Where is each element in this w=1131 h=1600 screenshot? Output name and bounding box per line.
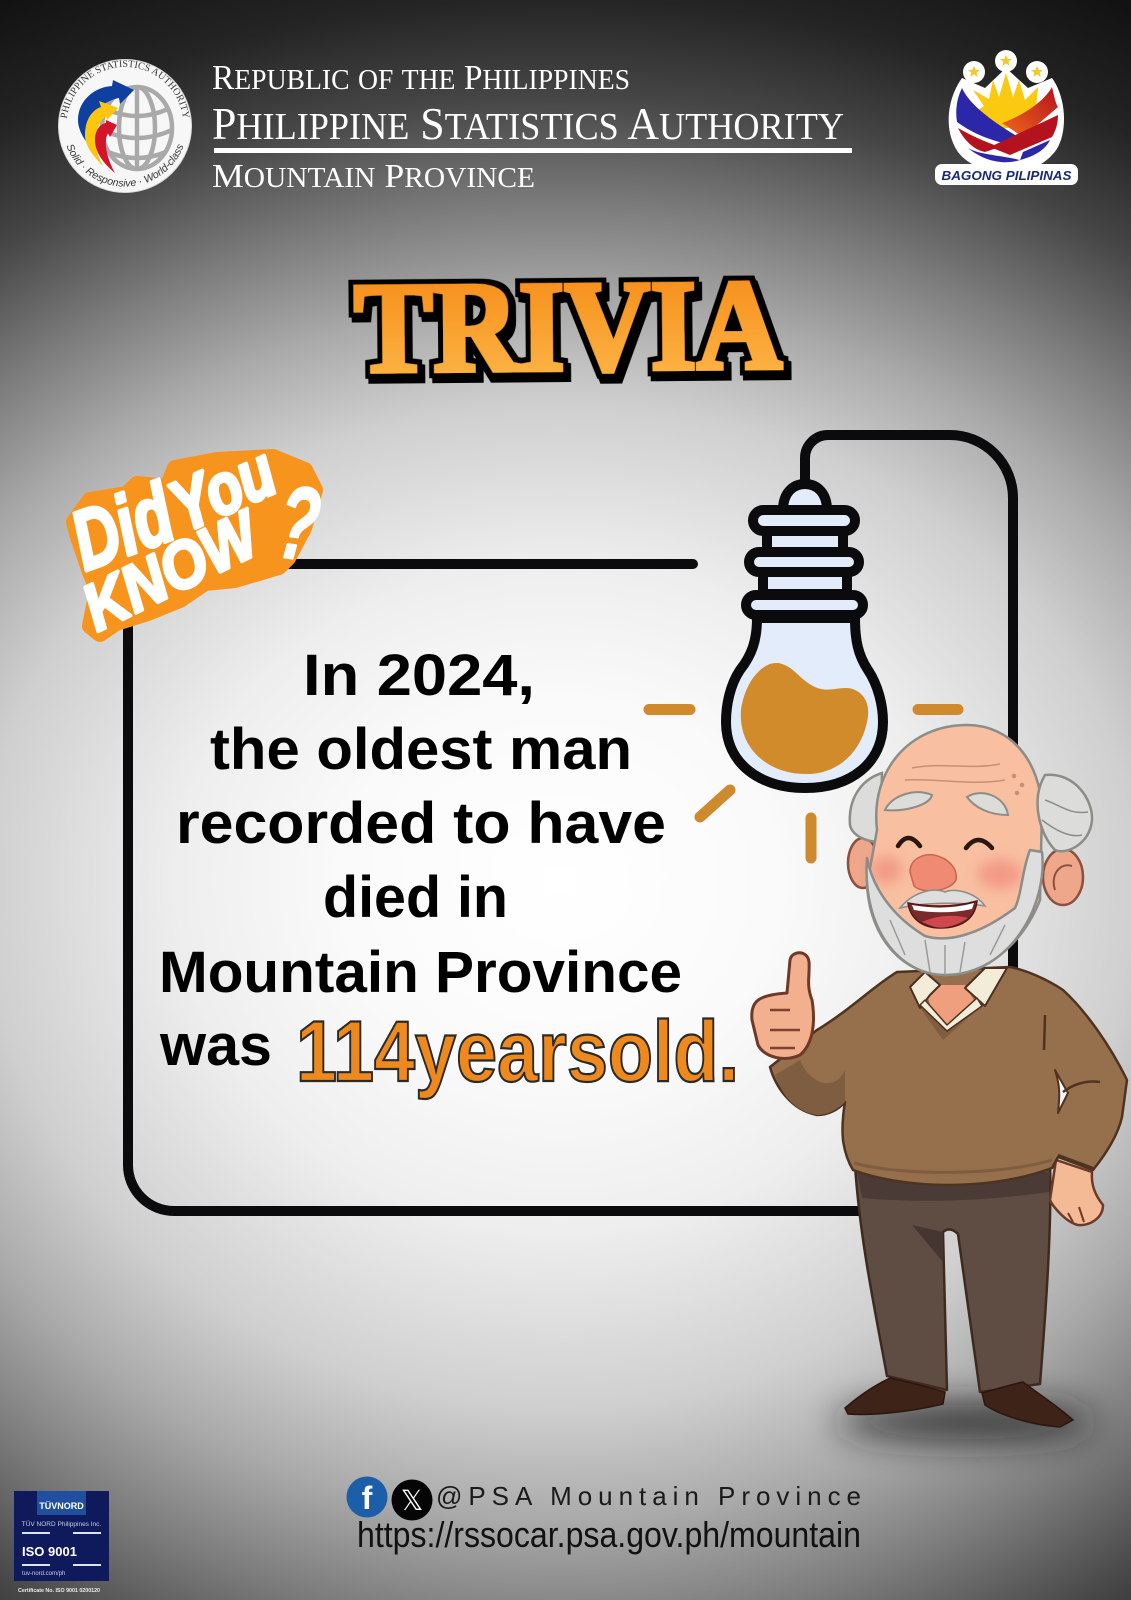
badge url: tuv-nord.com/ph <box>22 1571 65 1577</box>
moustache <box>900 890 985 908</box>
logo ring text: top: PHILIPPINE STATISTICS AUTHORITY <box>60 60 190 118</box>
province line: MOUNTAIN PROVINCE <box>212 158 535 195</box>
header: agency text <box>212 58 852 195</box>
sweater <box>770 967 1127 1185</box>
logo arrows <box>78 80 134 173</box>
header: PSA logo <box>58 59 192 193</box>
line 5: Mountain Province <box>159 940 682 1005</box>
shoes <box>845 1378 1073 1427</box>
trousers <box>855 1165 1050 1392</box>
left fist at hip <box>1050 1160 1103 1225</box>
badge: Did You Know? <box>59 431 327 645</box>
logo ring text: bottom: Solid · Responsive · World-class <box>67 144 183 187</box>
republic line: REPUBLIC OF THE PHILIPPINES <box>212 58 630 97</box>
header underline <box>214 148 852 153</box>
badge question mark: ? <box>271 464 327 584</box>
forehead wrinkles and spots <box>905 764 1024 794</box>
beard strands <box>890 920 1005 975</box>
illustration: smiling old man giving thumbs up <box>752 725 1127 1440</box>
badge ISO text: ISO 9001 <box>22 1544 77 1559</box>
bulb glass <box>726 618 883 788</box>
icon: X: 𝕏 <box>401 1485 423 1516</box>
logo lower blue bands <box>968 140 1050 162</box>
mouth <box>908 901 977 928</box>
certification badge: TUV NORD ISO 9001 <box>14 1491 109 1594</box>
eyebrows <box>885 792 1008 815</box>
cheeks <box>870 856 1022 889</box>
badge word: You: You <box>158 431 287 548</box>
logo red band <box>1002 87 1058 137</box>
closed smiling eyes <box>898 838 992 848</box>
left hair tuft <box>850 773 882 842</box>
thumbs-up hand <box>752 953 814 1058</box>
line 2: the oldest man <box>210 717 632 782</box>
right hair tuft <box>1038 775 1092 851</box>
logo stars <box>968 55 1043 77</box>
icon: light rays <box>649 710 958 858</box>
head <box>867 725 1042 975</box>
title: TRIVIA: TRIVIA <box>353 253 783 401</box>
line 4: died in <box>323 865 508 930</box>
bulb screw base <box>767 530 843 552</box>
logo globe <box>102 87 172 169</box>
line 3: recorded to have <box>176 791 666 856</box>
highlight: 114 years old: 114yearsold. <box>296 1004 739 1100</box>
panel frame <box>128 435 1013 1211</box>
bulb orange fill <box>741 663 868 774</box>
nose <box>910 855 956 891</box>
certification badge: TUV NORD ISO 9001: TÜVNORD <box>39 1501 84 1511</box>
line 1: In 2024, <box>303 643 535 708</box>
agency name: PHILIPPINE STATISTICS AUTHORITY <box>212 98 844 149</box>
certificate number: Certificate No. ISO 9001 0200120 <box>18 1588 100 1594</box>
icon: X <box>392 1480 432 1520</box>
logo blue band <box>956 88 1023 146</box>
icon: hanging light bulb <box>726 484 883 788</box>
line 6: was: was <box>159 1013 272 1078</box>
badge word: Did: Did <box>59 465 186 588</box>
Bagong Pilipinas logo: BAGONG PILIPINAS <box>942 168 1072 183</box>
shirt collar <box>910 968 1007 1040</box>
bulb rings <box>753 510 855 531</box>
main trivia text <box>159 643 739 1100</box>
ground shadow <box>835 1404 1095 1440</box>
icon: Facebook: f <box>362 1480 373 1516</box>
beard <box>867 850 1043 975</box>
website url: https://rssocar.psa.gov.ph/mountain <box>357 1514 861 1555</box>
logo pill label <box>935 164 1078 185</box>
icon: Facebook <box>346 1476 388 1518</box>
logo sun <box>973 73 1040 130</box>
badge word: Know: KNOW <box>71 495 273 645</box>
social handle: @PSA Mountain Province <box>436 1481 861 1511</box>
badge brand tab <box>37 1491 86 1515</box>
Bagong Pilipinas logo <box>935 50 1078 185</box>
ears <box>848 838 1083 905</box>
bulb cap dome <box>783 484 827 510</box>
badge company: TÜV NORD Philippines Inc. <box>22 1520 101 1528</box>
